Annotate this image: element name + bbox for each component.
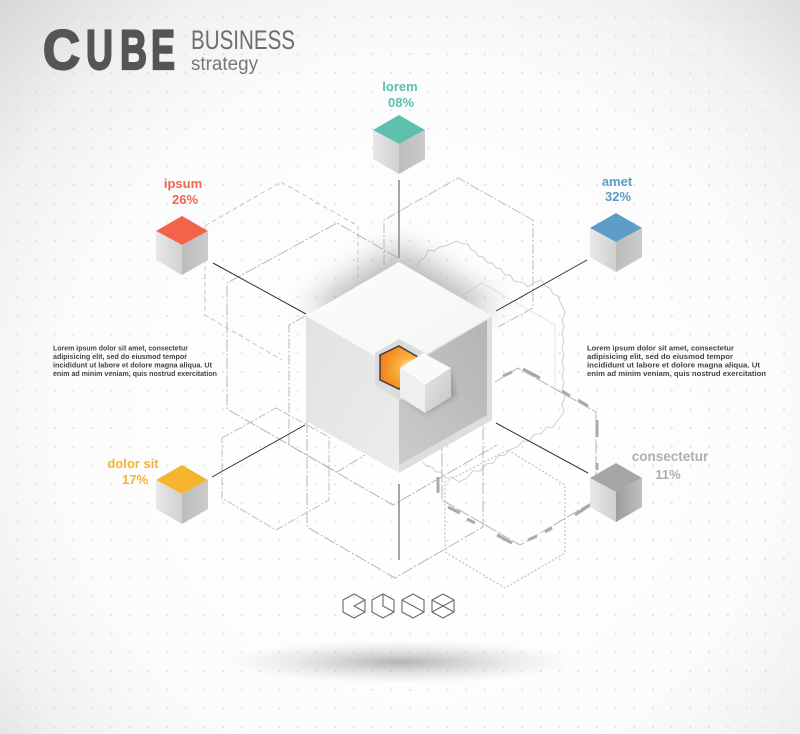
right text block: enim ad minim veniam, quis nostrud exercitation: [587, 369, 767, 378]
central cube: [306, 245, 500, 473]
floor shadow: [222, 640, 578, 684]
label: ipsum: [164, 176, 202, 207]
hexagon icons row: [343, 594, 454, 618]
right text block: adipisicing elit, sed do eiusmod tempor: [587, 352, 733, 361]
wireframe hexagon background: [205, 178, 597, 588]
label: lorem: lorem: [382, 79, 418, 94]
left text block: incididunt ut labore et dolore magna aliqua. Ut: [53, 360, 213, 370]
icon: hexagon with quadrant: [372, 594, 394, 618]
label: amet: 32%: [605, 189, 631, 204]
label: dolor sit: dolor sit: [107, 456, 159, 471]
icon: hexagon with cross: [432, 594, 454, 618]
subtitle: BUSINESS: BUSINESS: [191, 25, 295, 55]
cube: amet: [590, 213, 642, 272]
label: lorem: [382, 79, 418, 110]
label: consectetur: [632, 449, 709, 482]
cube: consectetur: [590, 463, 642, 522]
label: consectetur: consectetur: [632, 449, 709, 464]
title word: CUBE: B: [120, 18, 147, 81]
top face: [306, 262, 492, 370]
small cube shadow: [402, 368, 456, 414]
label: dolor sit: [107, 456, 159, 487]
icon: hexagon with diagonal: [402, 594, 424, 618]
label: amet: amet: [602, 174, 633, 189]
label: amet: [602, 174, 633, 204]
label: consectetur: 11%: [655, 467, 681, 482]
title: [43, 18, 295, 81]
left text block: enim ad minim veniam, quis nostrud exercitation: [53, 369, 217, 378]
glowing hexagon: [380, 346, 418, 389]
right text block: Lorem ipsum dolor sit amet, consectetur: [587, 344, 734, 352]
right face rim: [399, 316, 492, 473]
cube: ipsum: [156, 216, 208, 275]
label: ipsum: ipsum: [164, 176, 202, 191]
cube shadow: [306, 245, 500, 340]
small cube: [400, 353, 451, 413]
opening rim: [375, 339, 425, 400]
cube: lorem: [373, 115, 425, 174]
left face: [306, 316, 399, 473]
right text block: incididunt ut labore et dolore magna aliqua. Ut: [587, 360, 761, 370]
title word: CUBE: U: [86, 18, 113, 81]
left text block: Lorem ipsum dolor sit amet, consectetur: [53, 344, 188, 352]
label: dolor sit: 17%: [122, 472, 148, 487]
cube: dolor sit: [156, 465, 208, 524]
title word: CUBE: E: [151, 18, 175, 81]
subtitle: strategy: strategy: [191, 54, 258, 75]
icon: hexagon with wedge: [343, 594, 365, 618]
connector lines: [212, 180, 588, 560]
right text block: [587, 344, 767, 378]
title word: CUBE: C: [43, 18, 80, 81]
right face: [399, 320, 487, 465]
label: ipsum: 26%: [172, 192, 198, 207]
left text block: adipisicing elit, sed do eiusmod tempor: [53, 352, 187, 361]
label: lorem: 08%: [388, 95, 414, 110]
left text block: [53, 344, 217, 378]
